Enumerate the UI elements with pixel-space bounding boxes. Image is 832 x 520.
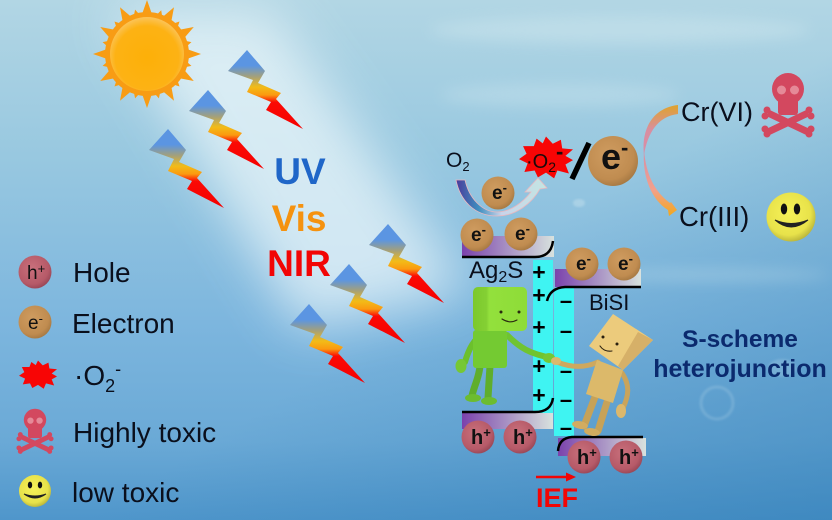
icon: smiley xyxy=(766,192,816,242)
electrons: e xyxy=(492,183,503,204)
icon: large electron: e xyxy=(601,136,621,177)
minus charges: – xyxy=(560,358,572,383)
panel: Ag2S valence band xyxy=(462,398,553,429)
holes: + xyxy=(525,425,533,440)
electrons: e xyxy=(471,225,482,246)
heading: light types xyxy=(267,151,331,284)
legend: low toxic xyxy=(19,475,179,508)
electrons: e xyxy=(618,254,629,275)
heading: S-scheme heterojunction: heterojunction xyxy=(653,355,827,383)
legend: hole xyxy=(18,256,131,288)
holes: h xyxy=(619,447,631,469)
arrow: O2 reduction xyxy=(456,178,547,216)
character: tan robot xyxy=(551,314,653,437)
label: O2: O xyxy=(446,149,462,172)
icon: superoxide burst: - xyxy=(556,139,563,164)
plus charges: + xyxy=(532,259,546,285)
plus charges xyxy=(532,259,546,408)
slash xyxy=(572,143,589,179)
icon: light bolts upper group xyxy=(149,50,303,208)
heading: S-scheme heterojunction xyxy=(653,326,827,383)
panel: built-in field bars xyxy=(533,260,574,436)
legend: electron: - xyxy=(39,311,43,326)
character: green robot xyxy=(456,287,555,405)
label: Cr(III): Cr(III) xyxy=(679,201,749,232)
legend: highly toxic xyxy=(16,409,216,454)
plus charges: + xyxy=(532,382,546,408)
legend: superoxide xyxy=(19,359,121,396)
panel: Ag2S conduction band: S xyxy=(507,257,523,284)
holes xyxy=(462,420,642,474)
legend: superoxide: ·O xyxy=(74,360,105,391)
legend: hole: h xyxy=(27,263,38,284)
heading: light types: NIR xyxy=(267,243,331,284)
holes: h xyxy=(513,427,525,449)
holes: h xyxy=(577,447,589,469)
electrons: - xyxy=(482,222,486,237)
electrons xyxy=(460,176,640,280)
electrons: e xyxy=(515,224,526,245)
minus charges xyxy=(560,288,572,440)
panel: Ag2S conduction band xyxy=(462,236,554,286)
electrons: - xyxy=(526,221,530,236)
panel: BiSI conduction band: BiSI xyxy=(589,290,629,315)
icon: large electron xyxy=(588,135,638,186)
heading: S-scheme heterojunction: S-scheme xyxy=(682,326,798,353)
arrow: Cr(VI) to Cr(III) xyxy=(644,105,678,216)
electrons: e xyxy=(576,254,587,275)
panel: BiSI valence band xyxy=(558,437,646,456)
legend: superoxide: - xyxy=(115,359,121,379)
electrons: - xyxy=(587,251,591,266)
panel: Ag2S conduction band: Ag xyxy=(469,257,498,284)
icon: skull xyxy=(762,73,814,138)
minus charges: – xyxy=(560,318,572,343)
icon: large electron: - xyxy=(621,135,628,160)
minus charges: – xyxy=(560,387,572,412)
heading: light types: Vis xyxy=(272,198,326,239)
panel: Ag2S conduction band: 2 xyxy=(498,269,507,286)
icon: superoxide burst: 2 xyxy=(548,159,556,175)
minus charges: – xyxy=(560,288,572,313)
holes: + xyxy=(589,445,597,460)
label: O2: 2 xyxy=(462,159,470,174)
electrons: - xyxy=(503,180,507,195)
icon: sun xyxy=(93,0,201,108)
minus charges: – xyxy=(560,415,572,440)
legend: low toxic: low toxic xyxy=(72,477,179,508)
icon: light bolts lower group xyxy=(290,224,444,383)
plus charges: + xyxy=(532,282,546,308)
plus charges: + xyxy=(532,353,546,379)
holes: + xyxy=(483,425,491,440)
holes: + xyxy=(631,445,639,460)
legend: hole: + xyxy=(38,261,45,276)
plus charges: + xyxy=(532,314,546,340)
legend: hole: Hole xyxy=(73,257,131,288)
legend: superoxide: 2 xyxy=(105,376,115,396)
panel: BiSI conduction band xyxy=(547,269,641,315)
icon: superoxide burst xyxy=(519,136,573,178)
arrow: IEF direction xyxy=(536,472,576,482)
holes: h xyxy=(471,427,483,449)
heading: light types: UV xyxy=(274,151,326,192)
legend: highly toxic: Highly toxic xyxy=(73,417,216,448)
icon: superoxide burst: ·O xyxy=(526,151,548,173)
label: Cr(VI): Cr(VI) xyxy=(681,97,753,127)
panel: legend xyxy=(16,256,216,508)
legend: electron: e xyxy=(28,313,39,334)
label: IEF: IEF xyxy=(536,483,578,513)
legend: electron: Electron xyxy=(72,308,175,339)
legend: electron xyxy=(18,306,175,339)
electrons: - xyxy=(629,251,633,266)
